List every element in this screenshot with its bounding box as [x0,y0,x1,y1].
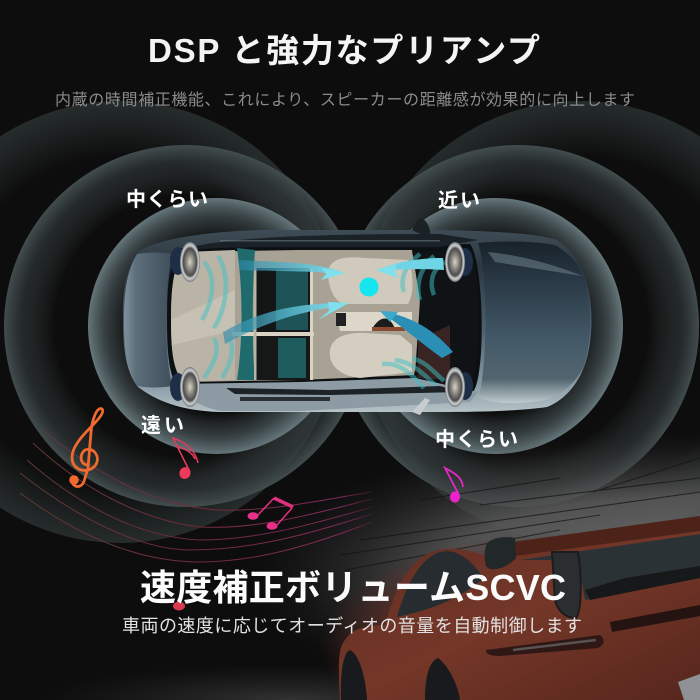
front footwell [412,250,479,388]
black cabin edge [167,244,482,392]
arrows [223,258,453,358]
label: near: 近い [438,189,480,212]
hood [478,242,590,403]
car body [123,230,592,412]
car window [397,551,484,617]
speaker: rear right [170,367,200,407]
arrow: rear-left speaker to listener [238,260,342,275]
listener dot [360,278,378,296]
wheels [341,650,367,700]
mirror bottom [412,398,430,415]
speaker: front left [445,242,473,282]
road background [0,430,700,700]
rear windows band [237,248,255,380]
car top view [123,218,592,415]
trunk [124,252,172,388]
title: DSP と強力なプリアンプ [148,32,540,69]
speaker: rear left [170,242,200,282]
arrow: front-right speaker to listener [380,311,453,358]
spoiler [505,516,700,556]
speaker: front right [445,367,473,407]
arrow: front-left speaker to listener [378,258,444,270]
subtitle: 内蔵の時間補正機能、これにより、スピーカーの距離感が効果的に向上します [55,91,635,109]
center console [336,312,412,331]
sound waves: right side [337,101,700,543]
red sports car [320,515,700,700]
icon: magenta note [445,468,463,502]
icon: red eighth note [173,438,198,481]
description: 車両の速度に応じてオーディオの音量を自動制御します [122,616,582,636]
front seats [328,257,412,304]
sound waves: left side [0,101,366,543]
rear seats [255,268,311,332]
rear shelf [171,250,235,382]
label: medium top left: 中くらい [126,188,208,211]
bottom sill [176,378,478,411]
icon: pink beamed notes [248,498,293,530]
mirror top [412,218,430,236]
label: far: 遠い [141,414,184,437]
rear glass [520,534,700,600]
arrow: rear-right speaker to listener [223,303,345,344]
top sill [180,234,478,250]
label: medium bottom right: 中くらい [435,428,518,451]
icon: treble clef [69,409,103,486]
icon: partial note behind heading [173,602,185,610]
tail light [486,635,604,656]
teal sound arcs [202,254,445,388]
staff lines [20,430,372,562]
licence plate [678,674,700,700]
heading: SCVC: 速度補正ボリュームSCVC [140,567,566,608]
interior [171,250,420,382]
